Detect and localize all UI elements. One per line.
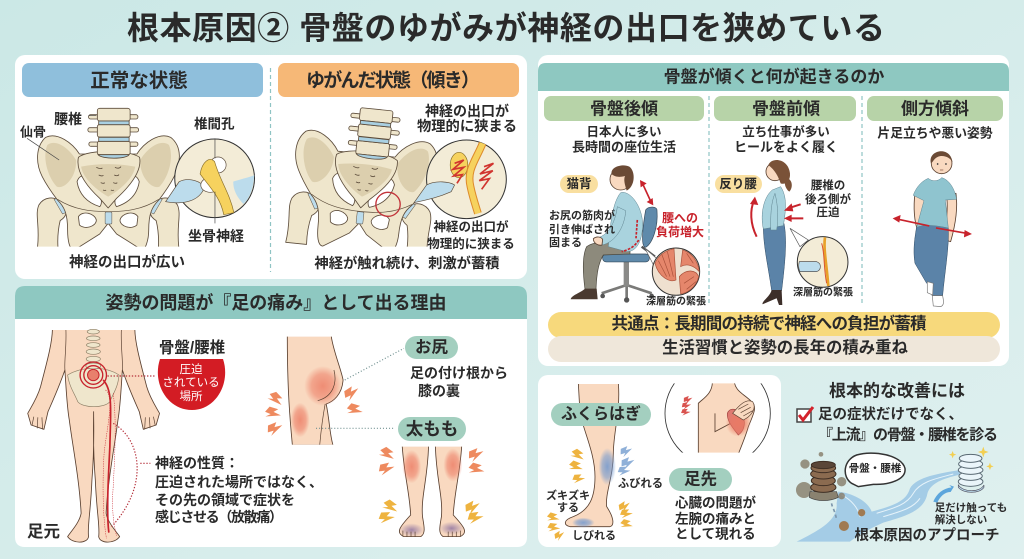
text: buttock pain range xyxy=(410,365,508,399)
pill: buttock: お尻 xyxy=(415,338,448,356)
icon: red checkbox xyxy=(797,407,813,422)
heading: normal state: 正常な状態 xyxy=(90,69,188,92)
column: posterior tilt: 骨盤後傾 xyxy=(590,98,658,118)
pill: toes: 足先 xyxy=(684,470,717,488)
pill: thigh: 太もも xyxy=(406,419,458,439)
panel: why posture appears as leg pain xyxy=(15,286,527,547)
text: recommendation: 足の症状だけでなく、 xyxy=(818,405,963,423)
banner: lifestyle accumulation xyxy=(548,336,1000,362)
labels: tilted pelvis: 神経の出口が xyxy=(425,103,509,119)
callout: compressed location xyxy=(158,359,225,410)
heading: 姿勢の問題が『足の痛み』として出る理由 xyxy=(106,292,446,313)
column: anterior tilt: 立ち仕事が多い xyxy=(742,124,830,139)
pill: calf: ふくらはぎ xyxy=(561,404,641,423)
labels: tilted pelvis: 物理的に狭まる xyxy=(427,236,515,251)
pill: swayback xyxy=(715,175,762,193)
labels: tilted pelvis: 神経が触れ続け、刺激が蓄積 xyxy=(314,254,500,272)
heading: 骨盤が傾くと何が起きるのか xyxy=(664,66,884,86)
column: anterior tilt: ヒールをよく履く xyxy=(734,140,838,154)
heading: 根本的な改善には xyxy=(829,380,965,400)
labels: leg sensations: しびれる xyxy=(572,528,616,542)
column: anterior tilt: 骨盤前傾 xyxy=(752,100,820,118)
text: heart analogy: 心臓の問題が xyxy=(675,494,756,510)
banner: lifestyle accumulation: 生活習慣と姿勢の長年の積み重ね xyxy=(662,338,909,357)
text: nature of nerves: その先の領域で症状を xyxy=(155,492,295,508)
labels: normal pelvis: 仙骨 xyxy=(20,124,46,140)
pill: hunched back: 猫背 xyxy=(566,176,592,191)
text: recommendation xyxy=(818,405,998,444)
illustration: normal pelvis xyxy=(27,108,255,250)
pill: hunched back xyxy=(560,175,598,193)
labels: normal pelvis: 腰椎 xyxy=(54,111,82,127)
callout: compressed location: 圧迫 xyxy=(180,363,203,376)
text: touching feet alone doesn't solve: 足だけ触っても xyxy=(935,501,1007,514)
annotation: glute muscles stretched: お尻の筋肉が xyxy=(549,208,615,222)
labels: normal pelvis: 神経の出口が広い xyxy=(69,253,185,271)
label: feet: 足元 xyxy=(27,523,60,541)
labels: normal pelvis: 椎間孔 xyxy=(194,116,235,132)
annotation: rear lumbar compressed: 後ろ側が xyxy=(805,192,851,206)
text: nature of nerves xyxy=(155,455,323,525)
pill: swayback: 反り腰 xyxy=(719,177,757,191)
heading: distorted state xyxy=(278,63,519,97)
illustration: buttock and thighs pain xyxy=(263,336,486,479)
labels: leg sensations: ズキズキ xyxy=(546,488,590,502)
caption: root cause approach: 根本原因のアプローチ xyxy=(854,527,1000,544)
banner: common point: 共通点：長期間の持続で神経への負担が蓄積 xyxy=(612,313,927,333)
heading: distorted state: ゆがんだ状態（傾き） xyxy=(306,68,480,92)
illustration: lower legs and feet xyxy=(378,446,484,537)
annotation: glute muscles stretched: 引き伸ばされ xyxy=(549,222,615,236)
labels: normal pelvis xyxy=(20,111,244,271)
column: posterior tilt: 日本人に多い xyxy=(586,124,662,139)
labels: tilted pelvis: 物理的に狭まる xyxy=(417,117,517,135)
column: anterior tilt: 深層筋の緊張 xyxy=(793,286,853,298)
column: lateral tilt: 側方傾斜 xyxy=(901,98,969,118)
annotation: increased lower back load: 負荷増大 xyxy=(656,224,704,239)
column: lateral tilt: 片足立ちや悪い姿勢 xyxy=(877,126,993,140)
panel: normal vs distorted pelvis xyxy=(15,55,527,279)
speech bubble: pelvis and lumbar: 骨盤・腰椎 xyxy=(849,462,902,474)
illustration: standing man xyxy=(893,151,972,307)
text: heart analogy: 左腕の痛みと xyxy=(675,510,756,526)
text: nature of nerves: 圧迫された場所ではなく、 xyxy=(155,474,323,490)
text: nature of nerves: 感じさせる（放散痛） xyxy=(155,509,283,525)
heading xyxy=(538,63,1009,91)
label: pelvis / lumbar: 骨盤/腰椎 xyxy=(159,338,226,356)
heading xyxy=(15,286,527,319)
column: anterior tilt xyxy=(714,96,856,305)
text: recommendation: 『上流』の骨盤・腰椎を診る xyxy=(818,426,998,444)
heading: normal state xyxy=(22,63,263,97)
annotation: rear lumbar compressed xyxy=(805,178,851,219)
pill: thigh xyxy=(398,417,466,441)
labels: tilted pelvis xyxy=(314,103,517,272)
labels: leg sensations: ふびれる xyxy=(618,476,663,490)
illustration: river with dirty and clean springs xyxy=(796,447,994,542)
column: lateral tilt xyxy=(867,96,1003,307)
column: posterior tilt: 長時間の座位生活 xyxy=(572,140,676,154)
illustration: chest with referred arm pain xyxy=(664,383,771,453)
pill: calf xyxy=(551,403,651,426)
callout: compressed location: 場所 xyxy=(180,389,203,403)
title: 根本原因② 骨盤のゆがみが神経の出口を狭めている xyxy=(127,10,885,46)
text: touching feet alone doesn't solve xyxy=(935,501,1007,526)
annotation: increased lower back load: 腰への xyxy=(662,211,698,225)
text: nature of nerves: 神経の性質： xyxy=(155,455,239,471)
text: touching feet alone doesn't solve: 解決しない xyxy=(935,513,987,526)
labels: leg sensations xyxy=(546,476,663,542)
text: buttock pain range: 膝の裏 xyxy=(418,383,460,399)
text: heart analogy: として現れる xyxy=(675,526,756,542)
speech bubble: pelvis and lumbar xyxy=(845,453,905,487)
panel: calf and foot symptoms xyxy=(538,361,781,547)
annotation: rear lumbar compressed: 圧迫 xyxy=(816,205,840,219)
panel: what happens when the pelvis tilts xyxy=(538,55,1009,366)
illustration: body with sciatic nerve xyxy=(28,329,160,542)
banner: common point xyxy=(548,312,1000,338)
labels: leg sensations: する xyxy=(557,501,579,514)
text: buttock pain range: 足の付け根から xyxy=(410,365,508,381)
annotation: glute muscles stretched xyxy=(549,208,615,249)
illustration: calf and foot xyxy=(545,383,636,542)
illustration: tilted pelvis with narrowed exit xyxy=(286,101,506,257)
annotation: increased lower back load xyxy=(656,211,704,239)
labels: tilted pelvis: 神経の出口が xyxy=(433,219,509,234)
labels: normal pelvis: 坐骨神経 xyxy=(188,228,244,244)
illustration: standing woman xyxy=(750,160,848,305)
annotation: glute muscles stretched: 固まる xyxy=(549,236,582,249)
annotation: rear lumbar compressed: 腰椎の xyxy=(811,178,845,192)
pill: buttock xyxy=(405,336,458,359)
column: posterior tilt: 深層筋の緊張 xyxy=(646,294,706,308)
section: root cause approach xyxy=(796,380,1007,544)
callout: compressed location: されている xyxy=(162,376,220,389)
column: posterior tilt xyxy=(544,96,706,308)
illustration: seated man xyxy=(571,165,700,303)
pill: toes xyxy=(669,468,732,491)
text: heart analogy xyxy=(675,494,756,542)
